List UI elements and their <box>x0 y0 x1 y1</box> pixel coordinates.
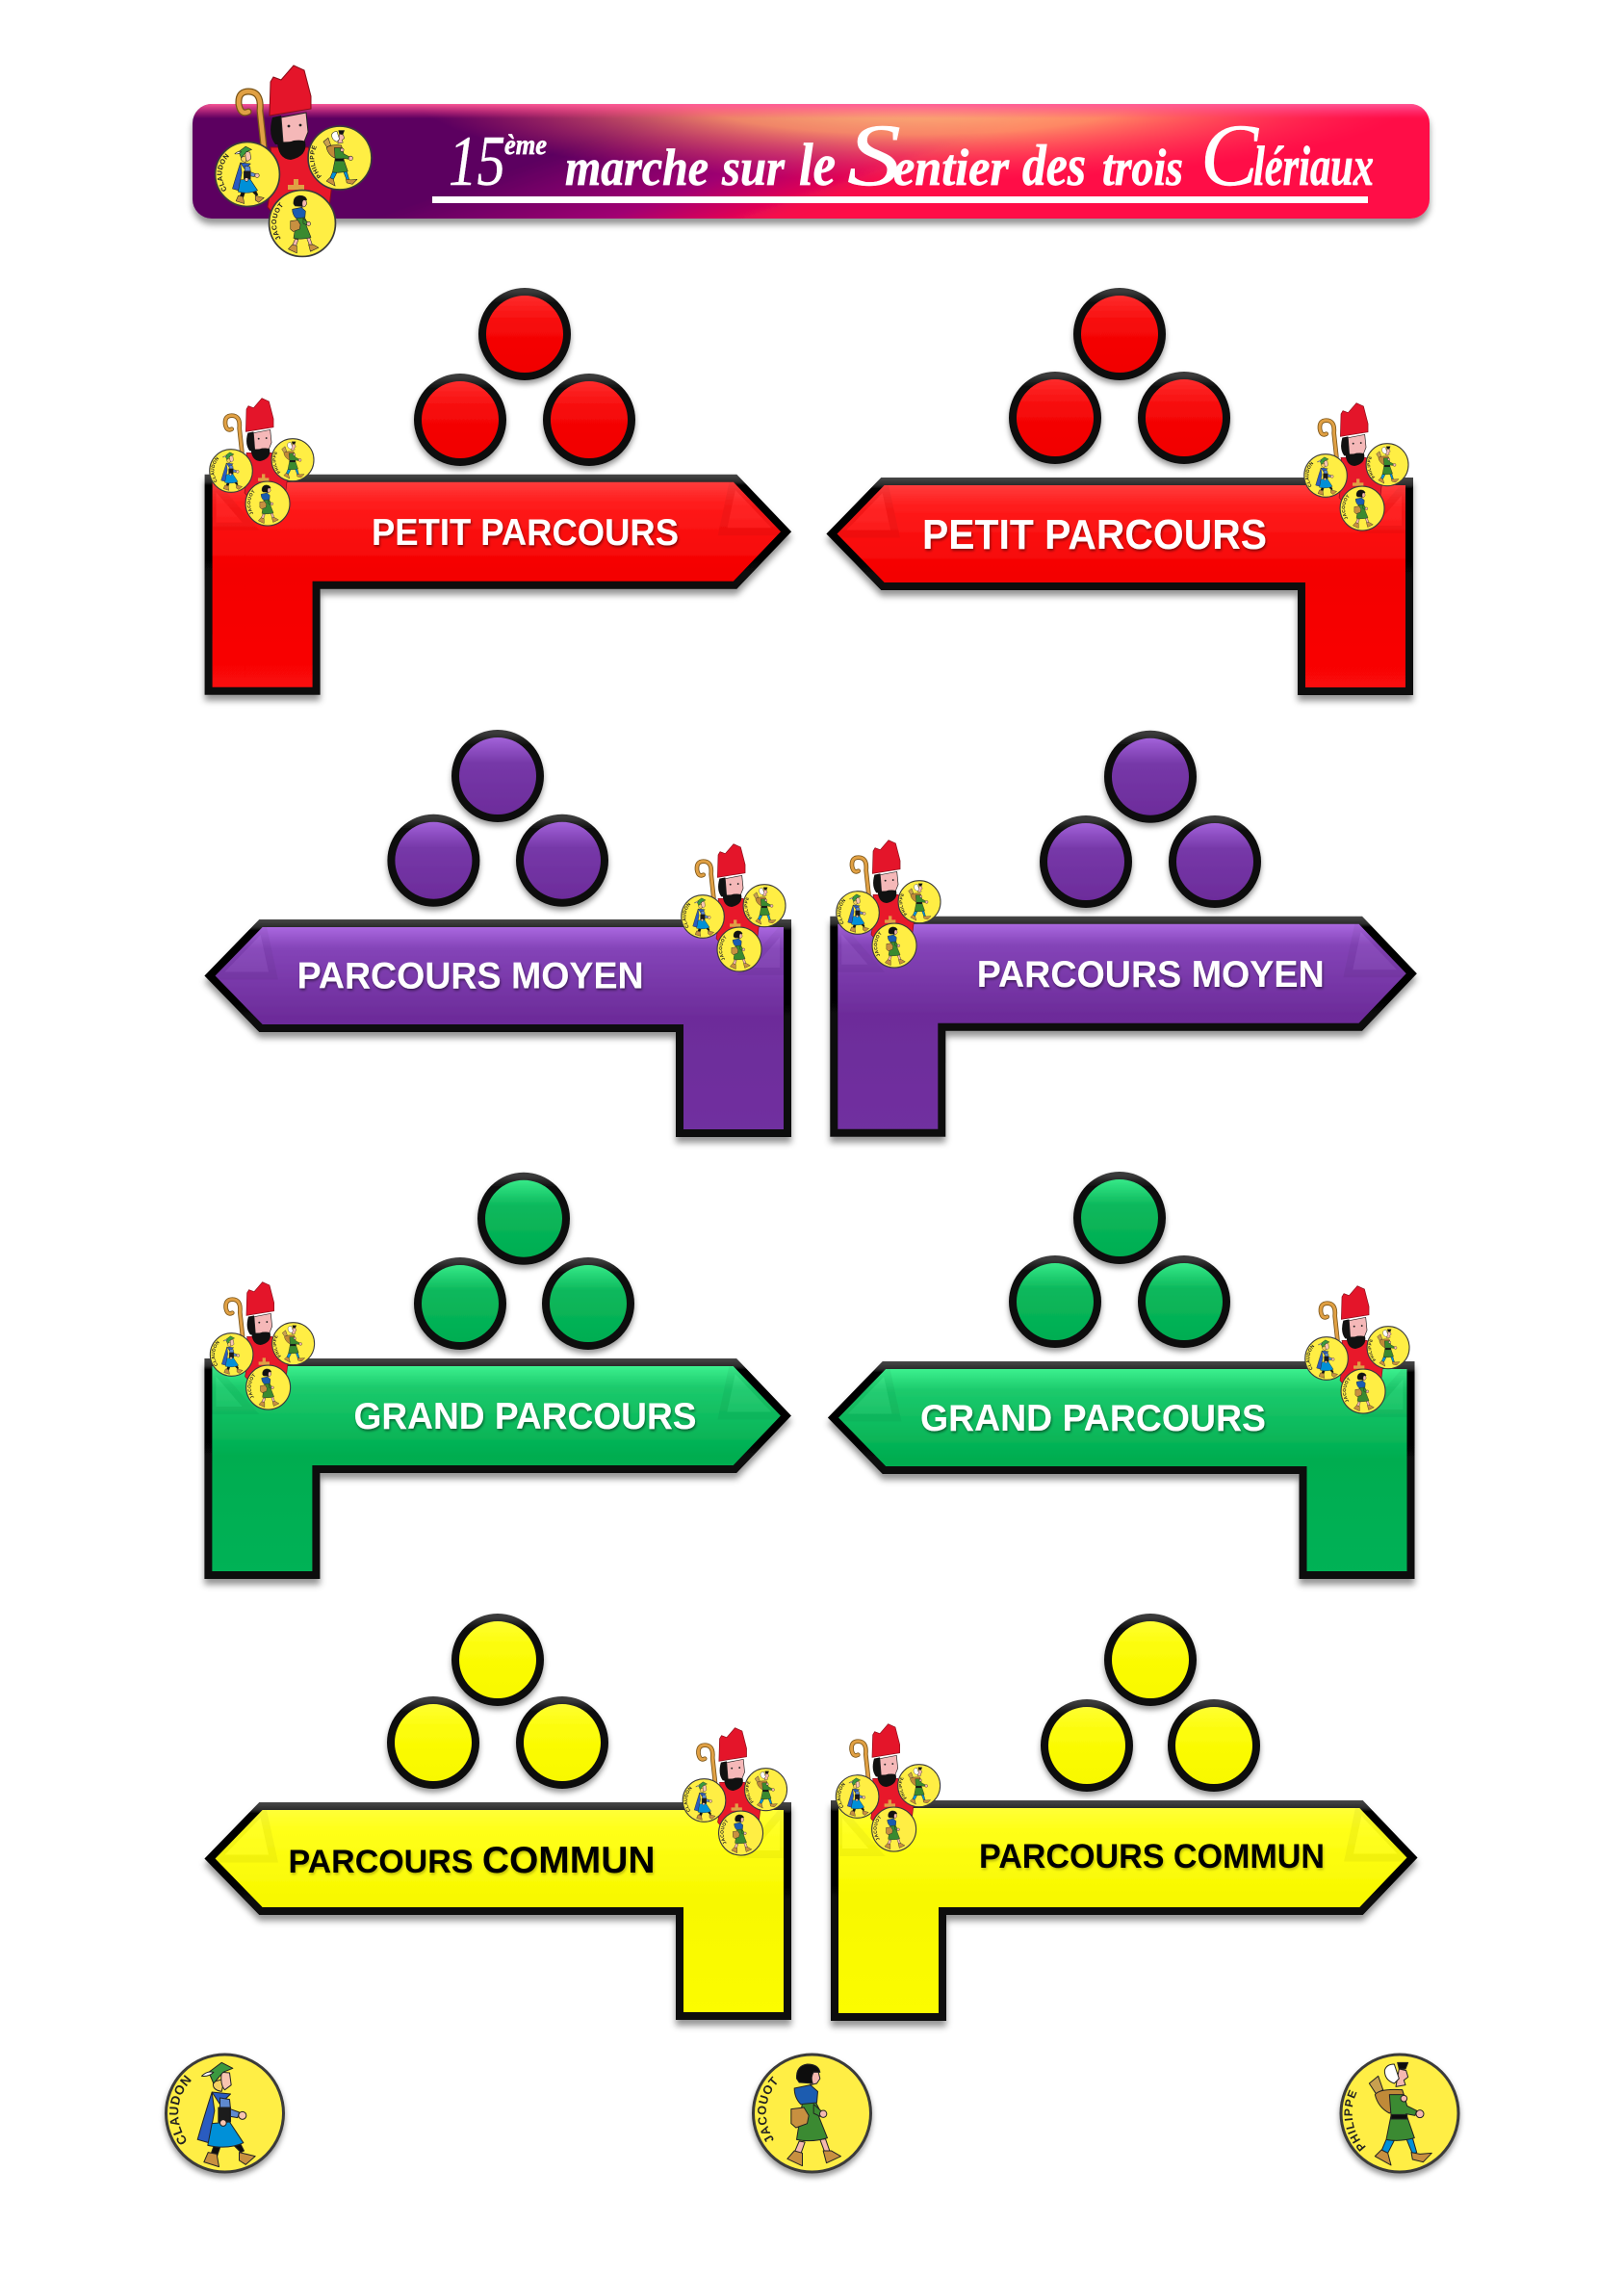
panel: parcours moyen, pointing right <box>834 735 1411 1133</box>
three yellow dots <box>1044 1617 1256 1788</box>
three green dots <box>1013 1176 1226 1344</box>
three green dots <box>418 1176 631 1346</box>
medallion: Philippe <box>1341 2055 1458 2172</box>
panel: parcours commun, pointing left <box>210 1617 787 2016</box>
title text: le <box>799 133 836 198</box>
panel: grand parcours, pointing left <box>834 1176 1411 1575</box>
panel: petit parcours, pointing left <box>832 292 1409 691</box>
green arrow <box>834 1365 1411 1575</box>
three purple dots <box>391 734 605 903</box>
red arrow <box>832 481 1409 691</box>
panel: petit parcours, pointing right <box>209 292 786 691</box>
title text: marche <box>565 139 709 196</box>
title text: 15 <box>449 122 505 201</box>
logo <box>210 399 314 526</box>
logo <box>683 1728 787 1855</box>
banner background <box>193 104 1430 219</box>
title text: entier <box>893 139 1010 196</box>
medallion: Jacouot <box>754 2055 870 2172</box>
purple arrow <box>210 923 787 1133</box>
medallion: Claudon <box>167 2055 283 2172</box>
three red dots <box>418 292 632 462</box>
logo <box>210 1282 315 1409</box>
logo <box>682 844 786 971</box>
logo <box>837 840 941 968</box>
title underline <box>432 196 1368 203</box>
label: GRAND PARCOURS <box>354 1396 697 1437</box>
logo <box>1305 1286 1409 1413</box>
banner logo: bishop with three medallions <box>215 65 372 256</box>
title text: des <box>1022 134 1086 197</box>
title banner <box>193 65 1430 256</box>
panel: grand parcours, pointing right <box>208 1176 786 1575</box>
yellow arrow <box>835 1804 1412 2017</box>
title text: ème <box>504 129 547 161</box>
green arrow <box>208 1362 786 1575</box>
label: PARCOURS COMMUN <box>979 1838 1325 1875</box>
title text: S <box>847 106 901 204</box>
yellow arrow <box>210 1806 787 2016</box>
label: PARCOURS COMMUN <box>289 1840 655 1881</box>
label: GRAND PARCOURS <box>920 1398 1266 1439</box>
label: PETIT PARCOURS <box>372 512 679 554</box>
panel: parcours moyen, pointing left <box>210 734 787 1133</box>
logo <box>836 1724 941 1851</box>
three red dots <box>1013 292 1226 460</box>
label: PARCOURS MOYEN <box>297 956 644 997</box>
three yellow dots <box>391 1617 605 1785</box>
title text: C <box>1200 106 1260 204</box>
title text: lériaux <box>1253 135 1374 197</box>
title text: sur <box>721 139 786 196</box>
title text: trois <box>1102 139 1183 196</box>
title text <box>449 106 1374 204</box>
label: PARCOURS MOYEN <box>977 954 1325 995</box>
red arrow <box>209 478 786 691</box>
purple arrow <box>834 920 1411 1133</box>
three purple dots <box>1044 735 1257 904</box>
panel: parcours commun, pointing right <box>835 1617 1412 2017</box>
label: PETIT PARCOURS <box>922 511 1267 558</box>
logo <box>1304 403 1408 530</box>
